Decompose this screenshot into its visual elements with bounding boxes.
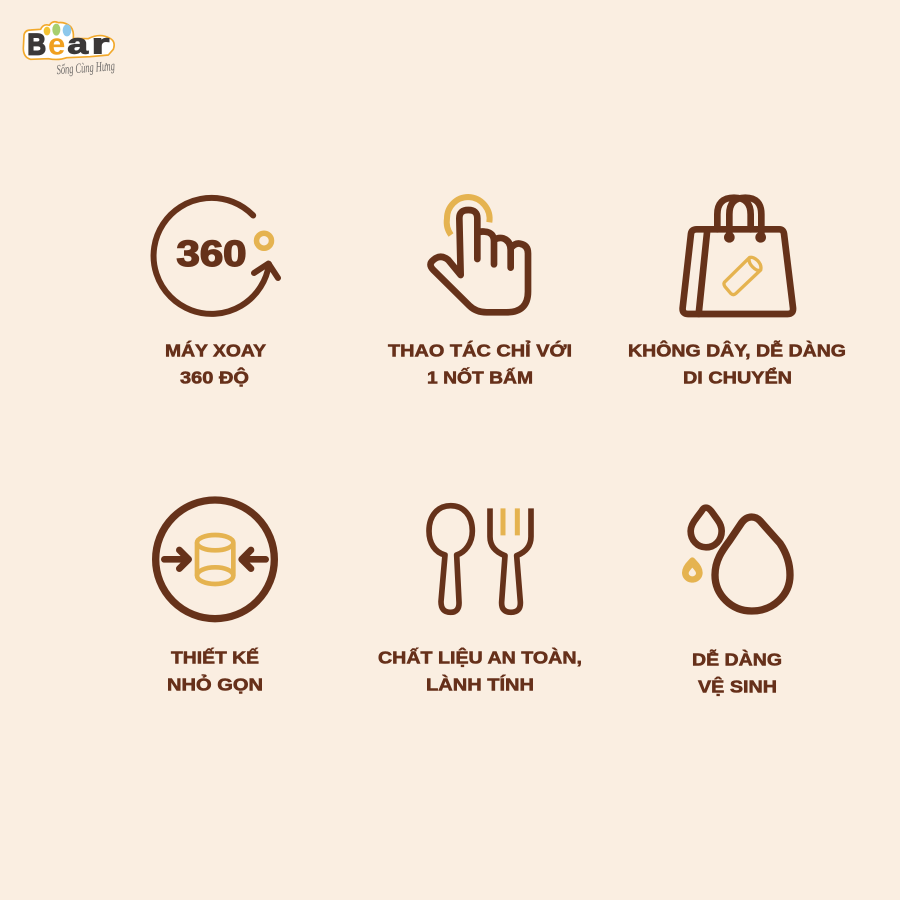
label: chất liệu an toàn, lành tính: CHẤT LIỆU AN TOÀN, (378, 646, 582, 668)
label: thao tác chỉ với 1 nốt bấm (388, 340, 572, 388)
label: dễ dàng vệ sinh (692, 648, 782, 696)
label: không dây, dễ dàng di chuyển: DI CHUYỂN (683, 366, 792, 388)
label: thao tác chỉ với 1 nốt bấm: 1 NỐT BẤM (427, 366, 533, 388)
icon: compact design (156, 500, 274, 619)
logo: Bear: e (48, 28, 65, 62)
label: dễ dàng vệ sinh: DỄ DÀNG (692, 648, 782, 670)
label: máy xoay 360 độ: 360 ĐỘ (180, 366, 249, 388)
label: không dây, dễ dàng di chuyển: KHÔNG DÂY, DỄ DÀNG (628, 340, 846, 360)
label: chất liệu an toàn, lành tính: LÀNH TÍNH (426, 674, 534, 694)
label: không dây, dễ dàng di chuyển (628, 340, 846, 388)
label: thiết kế nhỏ gọn: THIẾT KẾ (171, 646, 259, 668)
icon: 360 degree rotation: 360 (176, 233, 246, 274)
label: máy xoay 360 độ: MÁY XOAY (165, 340, 266, 360)
icon: 360 degree rotation (154, 198, 278, 314)
label: thiết kế nhỏ gọn (167, 646, 263, 694)
label: chất liệu an toàn, lành tính (378, 646, 582, 694)
logo: Bear (23, 22, 115, 78)
logo: Bear: r (91, 29, 109, 61)
icon: shopping bag with cordless device (683, 198, 793, 314)
icon: water drops (682, 508, 790, 611)
label: thiết kế nhỏ gọn: NHỎ GỌN (167, 674, 263, 694)
label: máy xoay 360 độ (165, 340, 266, 388)
logo: Bear: a (67, 29, 89, 61)
logo: Bear: B (27, 28, 46, 61)
logo: Bear: Sống Cùng Hưng (56, 59, 115, 78)
label: thao tác chỉ với 1 nốt bấm: THAO TÁC CHỈ VỚI (388, 340, 572, 360)
label: dễ dàng vệ sinh: VỆ SINH (698, 676, 777, 696)
icon: spoon and fork (429, 506, 531, 612)
icon: hand pressing button (430, 197, 528, 312)
